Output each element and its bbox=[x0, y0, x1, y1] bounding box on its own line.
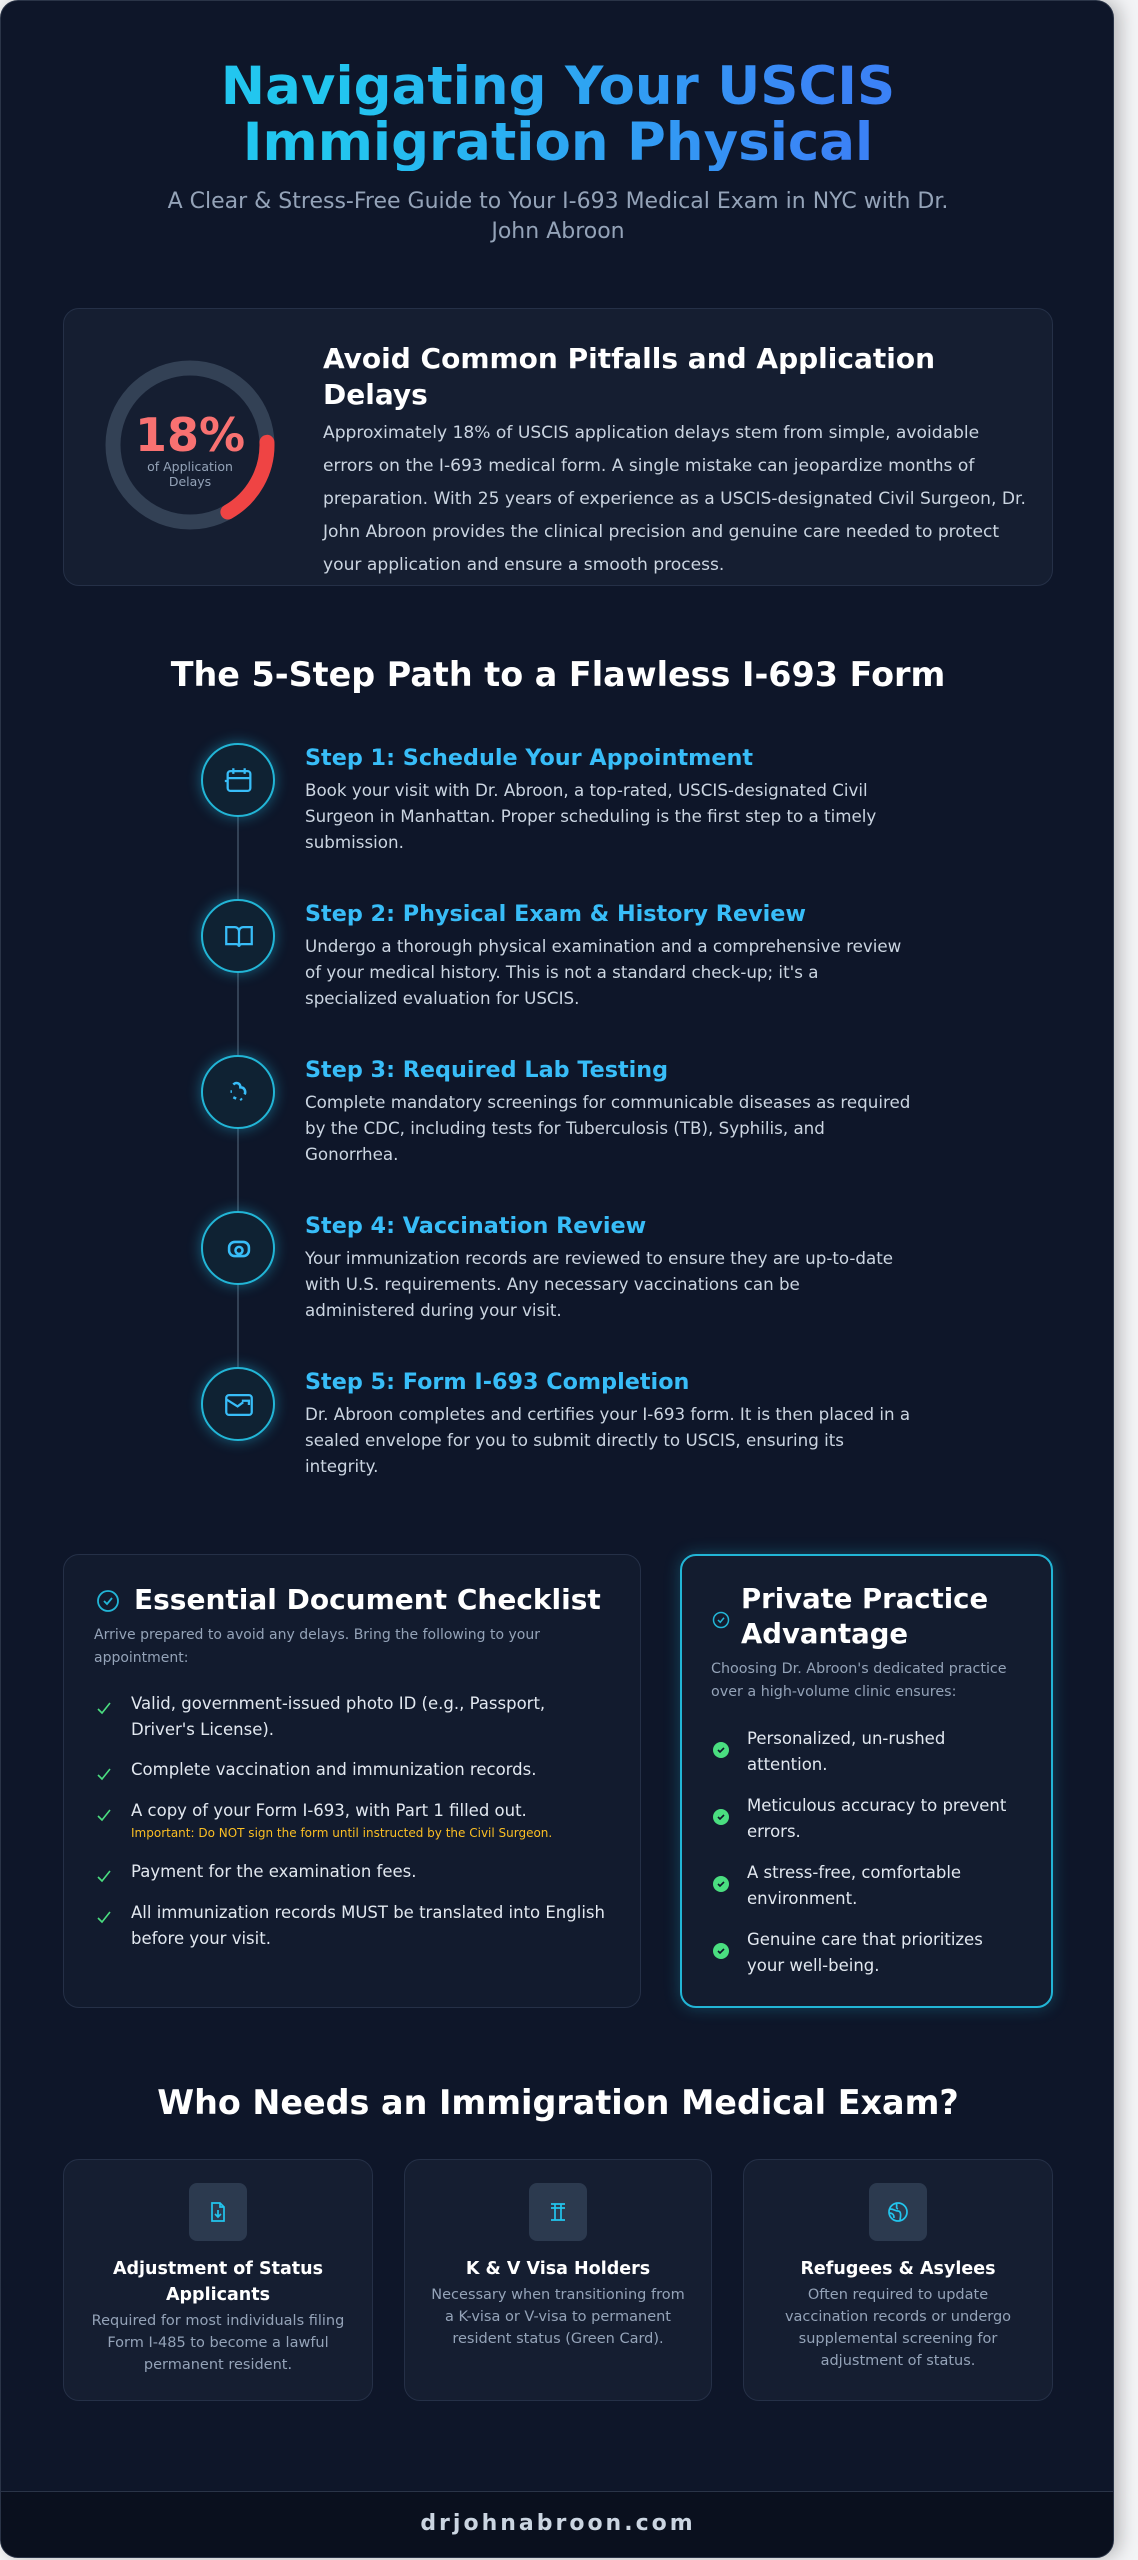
private title bbox=[741, 1583, 988, 1650]
step 1 bbox=[193, 735, 876, 852]
checklist items: A copy of your Form I-693, with Part 1 filled out. bbox=[131, 1801, 527, 1820]
donut chart bbox=[106, 360, 274, 530]
heading: who needs: Who Needs an Immigration Medical Exam? bbox=[157, 2083, 959, 2122]
footer bbox=[1, 2491, 1115, 2560]
icon: pillar bbox=[529, 2183, 587, 2241]
icon: calendar bbox=[201, 743, 275, 817]
card: K & V visa: Necessary when transitioning from a K-visa or V-visa to permanent resident status (Green Card). bbox=[431, 2287, 685, 2347]
card: K & V visa bbox=[404, 2159, 712, 2401]
footer: drjohnabroon.com bbox=[420, 2511, 696, 2536]
checklist items: Valid, government-issued photo ID (e.g., Passport, Driver's License). bbox=[131, 1694, 545, 1739]
card: adjustment of status: Adjustment of Status Applicants bbox=[113, 2259, 323, 2305]
timeline line bbox=[237, 801, 239, 1401]
private subtitle: Choosing Dr. Abroon's dedicated practice over a high-volume clinic ensures: bbox=[711, 1661, 1007, 1700]
checklist title: Essential Document Checklist bbox=[134, 1583, 601, 1616]
checklist items: Payment for the examination fees. bbox=[131, 1862, 417, 1881]
checklist items: Important: Do NOT sign the form until instructed by the Civil Surgeon. bbox=[131, 1826, 552, 1840]
step 4: Step 4: Vaccination Review bbox=[305, 1213, 646, 1239]
step 4: Your immunization records are reviewed to ensure they are up-to-date with U.S. requirements. Any necessary vaccinations can be administered during your visit. bbox=[305, 1248, 893, 1320]
step 4 bbox=[193, 1203, 893, 1320]
step 1: Step 1: Schedule Your Appointment bbox=[305, 745, 753, 771]
step 2: Step 2: Physical Exam & History Review bbox=[305, 901, 806, 927]
private items: Personalized, un-rushed attention. bbox=[747, 1729, 945, 1774]
icon: globe bbox=[869, 2183, 927, 2241]
body text: Approximately 18% of USCIS application delays stem from simple, avoidable errors on the I-693 medical form. A single mistake can jeopardize months of preparation. With 25 years of experience as a USCIS-designated Civil Surgeon, Dr. John Abroon provides the clinical precision and genuine care needed to protect your application and ensure a smooth process. bbox=[323, 423, 1026, 575]
checklist items: All immunization records MUST be translated into English before your visit. bbox=[131, 1903, 605, 1948]
private items: A stress-free, comfortable environment. bbox=[747, 1863, 961, 1908]
icon: vaccine bbox=[201, 1211, 275, 1285]
checklist items: Complete vaccination and immunization records. bbox=[131, 1760, 536, 1779]
card: refugees bbox=[743, 2159, 1053, 2401]
step 1: Book your visit with Dr. Abroon, a top-rated, USCIS-designated Civil Surgeon in Manhattan. Proper scheduling is the first step to a timely submission. bbox=[305, 780, 876, 852]
donut chart: Delays bbox=[169, 474, 211, 489]
private items: Genuine care that prioritizes your well-being. bbox=[747, 1930, 983, 1975]
private items: Meticulous accuracy to prevent errors. bbox=[747, 1796, 1006, 1841]
step 3: Step 3: Required Lab Testing bbox=[305, 1057, 668, 1083]
icon: envelope bbox=[201, 1367, 275, 1441]
title: Immigration Physical bbox=[243, 112, 873, 173]
icon: check circle small bbox=[712, 1612, 730, 1628]
checklist subtitle: Arrive prepared to avoid any delays. Bring the following to your appointment: bbox=[94, 1627, 540, 1666]
card: adjustment of status bbox=[63, 2159, 373, 2401]
icon: file bbox=[189, 2183, 247, 2241]
private title: Private Practice bbox=[741, 1583, 988, 1615]
private title: Advantage bbox=[741, 1618, 908, 1650]
heading: 5 steps: The 5-Step Path to a Flawless I-693 Form bbox=[171, 655, 945, 694]
card: refugees: Often required to update vaccination records or undergo supplemental screening for adjustment of status. bbox=[785, 2287, 1011, 2369]
step 3: Complete mandatory screenings for communicable diseases as required by the CDC, including tests for Tuberculosis (TB), Syphilis, and Gonorrhea. bbox=[305, 1092, 910, 1164]
panel: pitfalls bbox=[63, 308, 1053, 586]
card: adjustment of status: Required for most individuals filing Form I-485 to become a lawful permanent resident. bbox=[92, 2313, 344, 2373]
panel: checklist bbox=[63, 1554, 641, 2008]
step 3 bbox=[193, 1047, 910, 1164]
card: refugees: Refugees & Asylees bbox=[800, 2259, 996, 2279]
heading: Avoid Common Pitfalls and Application Delays bbox=[323, 342, 935, 411]
checklist items bbox=[98, 1694, 605, 1948]
title: Navigating Your USCIS bbox=[221, 56, 895, 117]
donut chart: 18% bbox=[135, 408, 245, 462]
donut chart: of Application bbox=[147, 459, 233, 474]
panel: private practice bbox=[680, 1554, 1053, 2008]
icon: check circle bbox=[97, 1590, 119, 1612]
icon: book bbox=[201, 899, 275, 973]
step 5: Step 5: Form I-693 Completion bbox=[305, 1369, 689, 1395]
step 2: Undergo a thorough physical examination and a comprehensive review of your medical history. This is not a standard check-up; it's a specialized evaluation for USCIS. bbox=[305, 936, 901, 1008]
card: K & V visa: K & V Visa Holders bbox=[466, 2259, 650, 2279]
step 5 bbox=[193, 1359, 910, 1476]
step 2 bbox=[193, 891, 901, 1008]
private items bbox=[713, 1729, 1006, 1975]
subtitle: A Clear & Stress-Free Guide to Your I-693 Medical Exam in NYC with Dr. John Abroon bbox=[168, 189, 948, 244]
step 5: Dr. Abroon completes and certifies your I-693 form. It is then placed in a sealed envelope for you to submit directly to USCIS, ensuring its integrity. bbox=[305, 1404, 910, 1476]
title bbox=[1, 59, 1115, 171]
icon: lab bbox=[201, 1055, 275, 1129]
